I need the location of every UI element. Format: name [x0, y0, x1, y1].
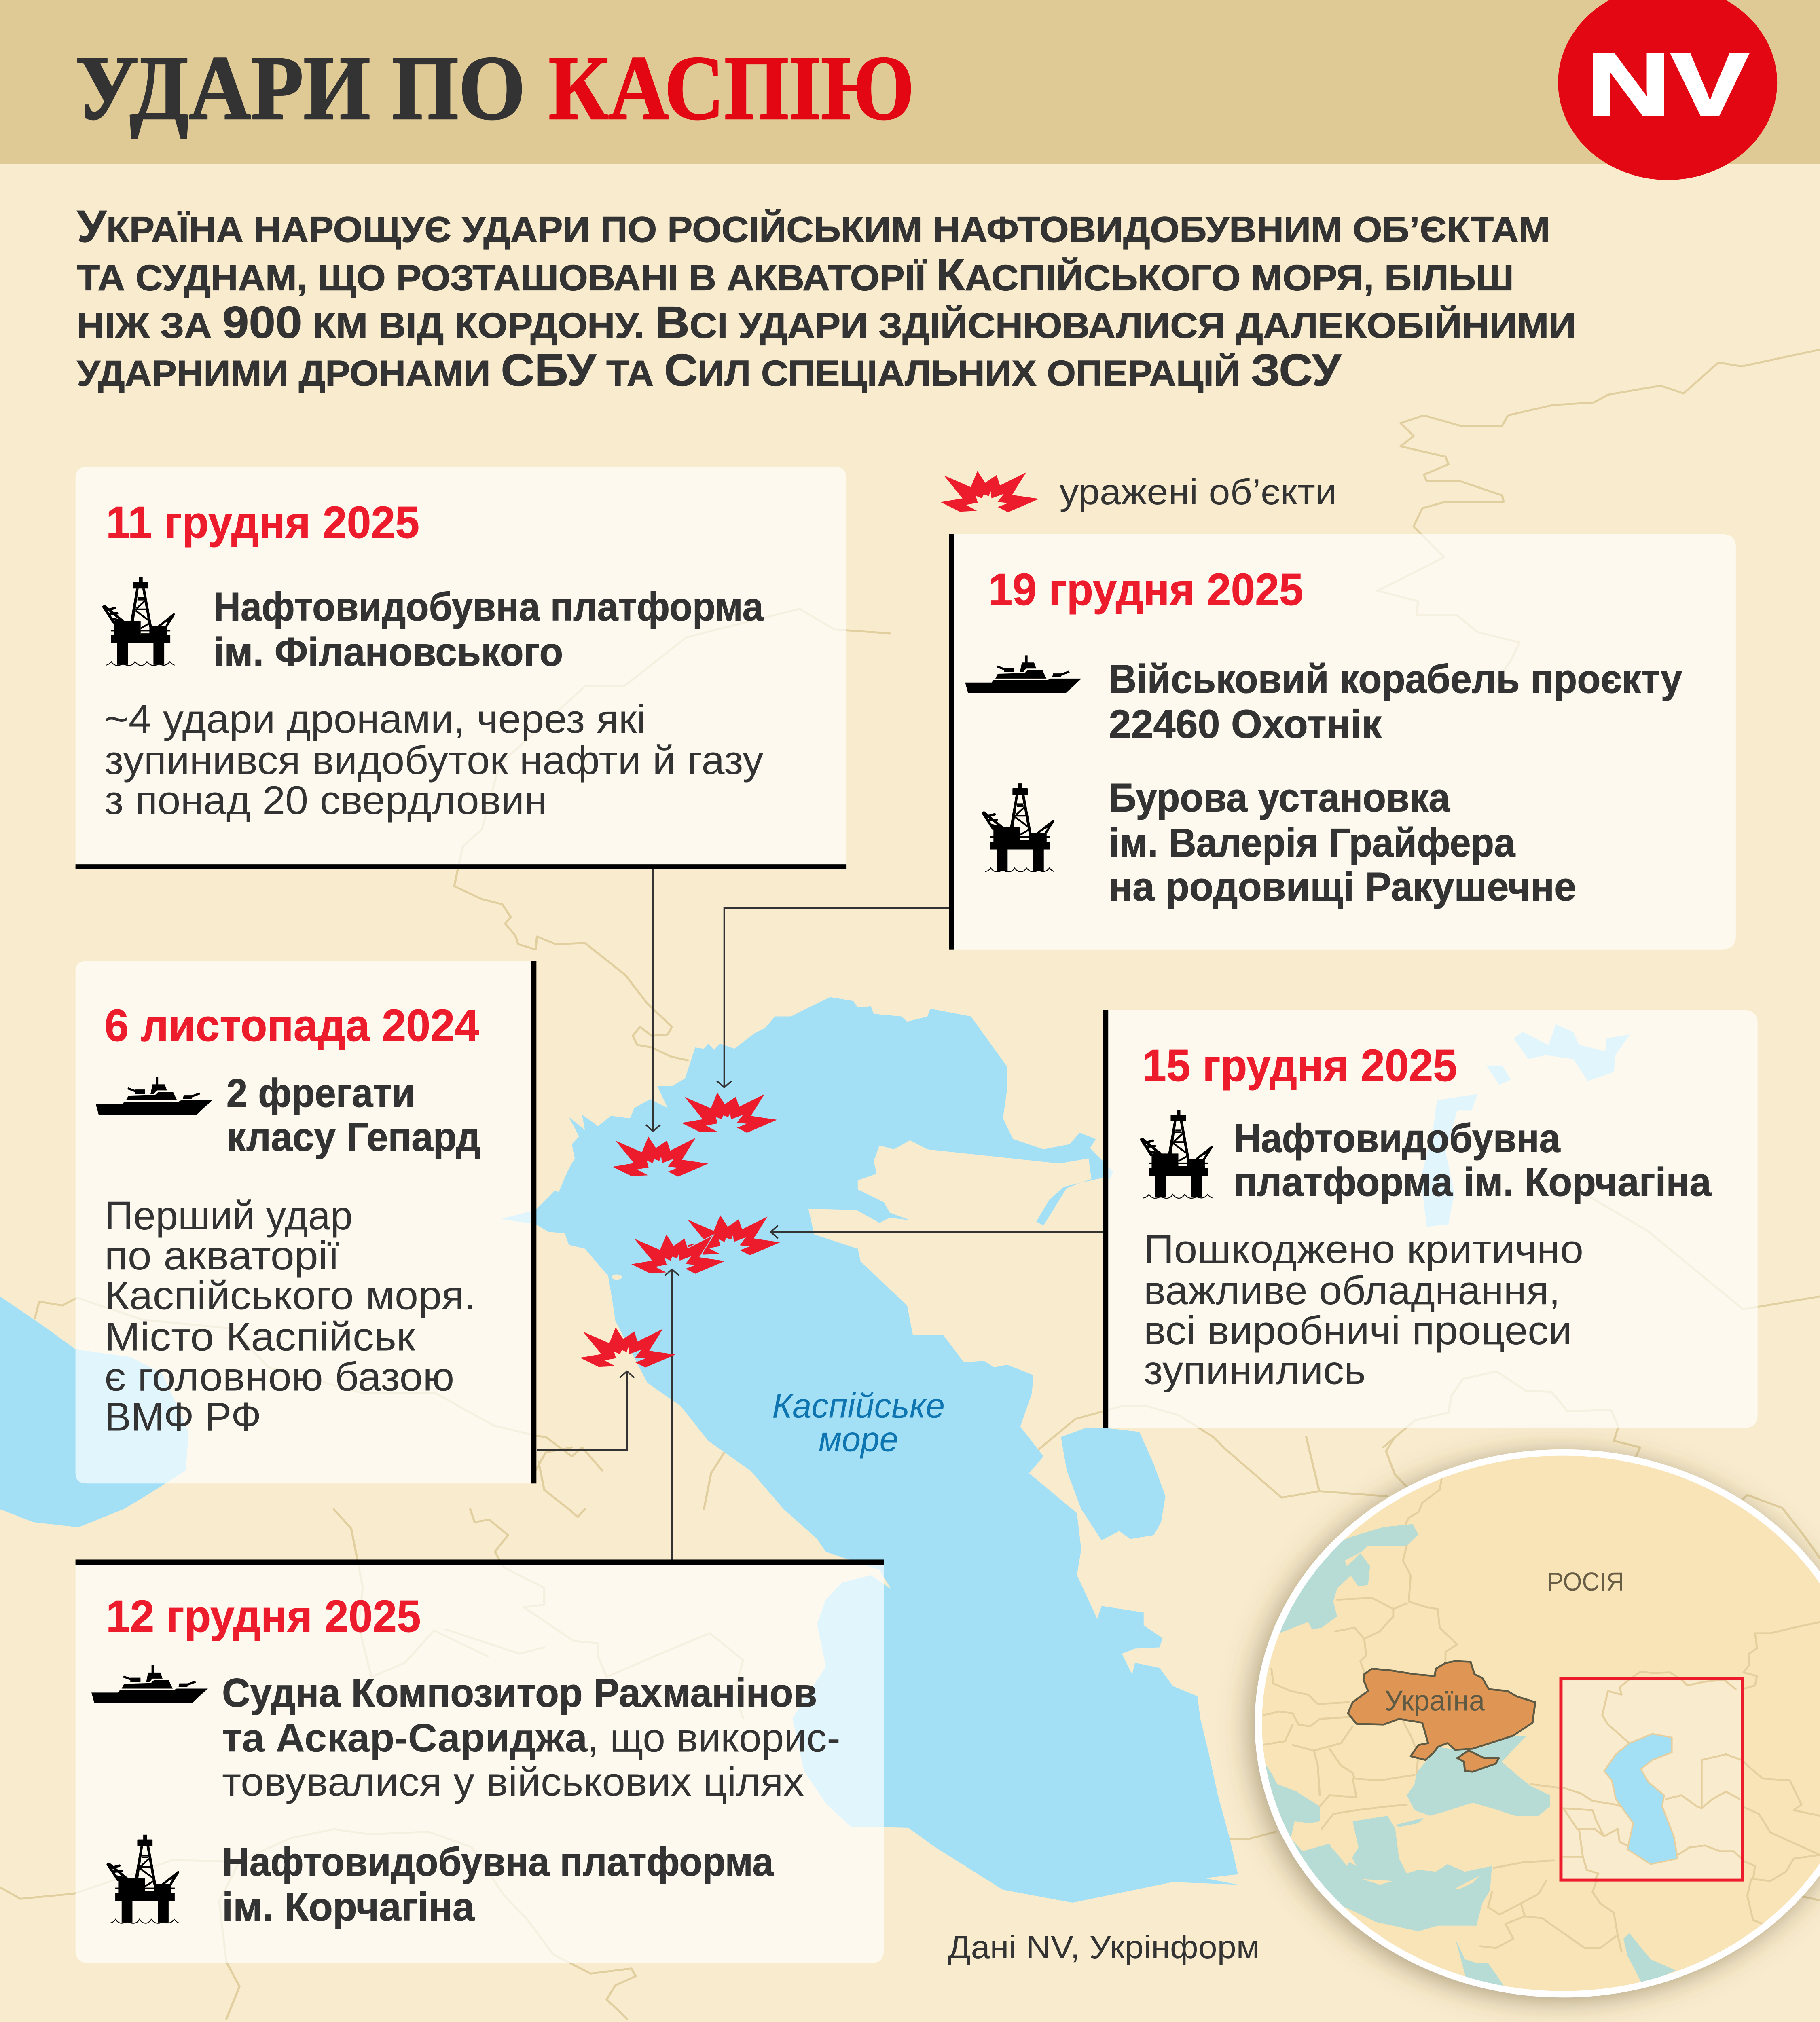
panel: 11 грудня 2025: зупинився видобуток нафти й газу	[104, 738, 764, 783]
connector: 15 грудня	[771, 1225, 1103, 1238]
label: Russia: РОСІЯ	[1547, 1568, 1624, 1596]
panel: 6 листопада 2024: 6 листопада 2024	[104, 1000, 479, 1051]
legend: уражені об’єкти	[1060, 472, 1337, 512]
legend	[940, 471, 1337, 512]
icon: frigate	[96, 1077, 212, 1115]
map: Kara-Bogaz lake	[1061, 1428, 1166, 1540]
panel: 15 грудня 2025: Нафтовидобувна	[1234, 1116, 1561, 1161]
panel: 15 грудня 2025: Пошкоджено критично	[1144, 1227, 1583, 1271]
intro text: УДАРНИМИ ДРОНАМИ СБУ ТА СИЛ СПЕЦІАЛЬНИХ ОПЕРАЦІЙ ЗСУ	[77, 345, 1342, 396]
panel: 6 листопада 2024: Місто Каспійськ	[104, 1315, 415, 1359]
icon: oil platform	[104, 577, 175, 666]
map: Black Sea	[0, 1297, 189, 1527]
sea label	[772, 1387, 945, 1459]
title: УДАРИ ПО	[76, 37, 525, 139]
panel: 12 грудня 2025: Нафтовидобувна платформа	[222, 1840, 774, 1885]
map: Aral Sea remnants	[1421, 1024, 1630, 1227]
connector: 19 грудня	[717, 908, 949, 1087]
map: small island	[612, 1275, 622, 1280]
explosion markers	[580, 1093, 780, 1368]
connector: 12 грудня	[665, 1269, 679, 1559]
panel: 6 листопада 2024: є головною базою	[104, 1355, 454, 1399]
panel: 6 листопада 2024	[76, 961, 536, 1483]
sea label: море	[819, 1420, 898, 1459]
panel: 12 грудня 2025: товувалися у військових цілях	[222, 1760, 804, 1804]
panel: 19 грудня 2025: 19 грудня 2025	[988, 564, 1303, 615]
icon: drilling rig	[983, 783, 1054, 872]
panel: 11 грудня 2025: ім. Філановського	[214, 630, 563, 675]
icon: oil platform	[1141, 1110, 1213, 1198]
sea label: Каспійське	[772, 1387, 945, 1425]
panel: 6 листопада 2024: ВМФ РФ	[104, 1395, 261, 1439]
panel: 12 грудня 2025: та Аскар-Сариджа, що викорис-	[222, 1716, 840, 1760]
panel: 15 грудня 2025: зупинились	[1144, 1348, 1366, 1393]
panel: 12 грудня 2025	[76, 1559, 884, 1963]
panel: 11 грудня 2025: 11 грудня 2025	[106, 497, 419, 548]
panel: 15 грудня 2025	[1103, 1010, 1758, 1428]
map: Caspian Sea	[501, 997, 1238, 1903]
inset locator map	[1252, 1453, 1820, 1999]
intro text	[77, 201, 1576, 396]
panel: 12 грудня 2025: 12 грудня 2025	[106, 1591, 421, 1642]
panel: 19 грудня 2025	[949, 534, 1736, 950]
icon: vessel	[91, 1665, 208, 1703]
header band	[0, 0, 1820, 164]
intro text: ТА СУДНАМ, ЩО РОЗТАШОВАНІ В АКВАТОРІЇ КАСПІЙСЬКОГО МОРЯ, БІЛЬШ	[77, 250, 1514, 300]
panel: 11 грудня 2025: ~4 удари дронами, через які	[104, 697, 646, 741]
frame: area of interest	[1561, 1679, 1742, 1880]
icon: oil platform	[108, 1835, 179, 1923]
panel: 15 грудня 2025: платформа ім. Корчагіна	[1234, 1160, 1712, 1205]
panel: 19 грудня 2025: Бурова установка	[1109, 776, 1450, 820]
intro text: УКРАЇНА НАРОЩУЄ УДАРИ ПО РОСІЙСЬКИМ НАФТОВИДОБУВНИМ ОБ’ЄКТАМ	[77, 201, 1550, 252]
panel: 6 листопада 2024: по акваторії	[104, 1233, 340, 1278]
panel: 11 грудня 2025: Нафтовидобувна платформа	[214, 585, 764, 629]
panel: 15 грудня 2025: всі виробничі процеси	[1144, 1308, 1572, 1353]
logo: NV circle: NV	[1586, 34, 1749, 134]
frame: inset outline	[1258, 1453, 1820, 1994]
panel: 15 грудня 2025: 15 грудня 2025	[1142, 1041, 1457, 1091]
panel: 6 листопада 2024: класу Гепард	[226, 1115, 480, 1159]
panel: 15 грудня 2025: важливе обладнання,	[1144, 1269, 1560, 1313]
label: Ukraine: Україна	[1384, 1685, 1485, 1717]
icon: warship	[965, 655, 1081, 693]
panel: 6 листопада 2024: 2 фрегати	[226, 1071, 415, 1115]
panel: 19 грудня 2025: 22460 Охотнік	[1109, 702, 1382, 747]
panel: 12 грудня 2025: Судна Композитор Рахманінов	[222, 1671, 817, 1715]
panel: 19 грудня 2025: ім. Валерія Грайфера	[1109, 821, 1516, 865]
title accent: КАСПІЮ	[548, 37, 914, 139]
panel: 6 листопада 2024: Каспійського моря.	[104, 1273, 476, 1318]
panel: 19 грудня 2025: на родовищі Ракушечне	[1109, 865, 1576, 909]
intro text: НІЖ ЗА 900 КМ ВІД КОРДОНУ. ВСІ УДАРИ ЗДІЙСНЮВАЛИСЯ ДАЛЕКОБІЙНИМИ	[77, 297, 1576, 348]
panel: 19 грудня 2025: Військовий корабель проєкту	[1109, 657, 1682, 702]
logo: NV circle	[1558, 0, 1777, 180]
connector: 11 грудня	[646, 869, 660, 1131]
panel: 6 листопада 2024: Перший удар	[104, 1194, 353, 1238]
panel: 12 грудня 2025: ім. Корчагіна	[222, 1885, 475, 1929]
panel: 11 грудня 2025: з понад 20 свердловин	[104, 778, 547, 823]
panel: 11 грудня 2025	[76, 467, 846, 869]
source note: Дані NV, Укрінформ	[948, 1929, 1260, 1965]
connector: 6 листопада	[537, 1371, 634, 1450]
